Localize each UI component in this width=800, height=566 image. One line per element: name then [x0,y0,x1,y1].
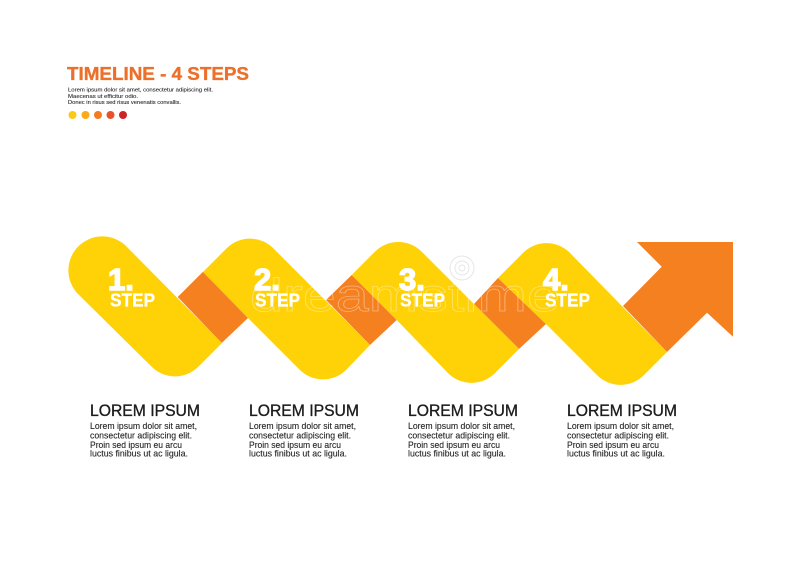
column 3 text: consectetur adipiscing elit. [408,430,510,440]
column 2 text: consectetur adipiscing elit. [249,430,351,440]
step 4 label: 4. [543,262,569,297]
intro text [68,88,213,106]
step 1 label: 1. [108,262,134,297]
arrow head [623,242,733,352]
step 1 label [108,262,155,310]
column 1 text: luctus finibus ut ac ligula. [90,448,188,458]
column 3 text: luctus finibus ut ac ligula. [408,448,506,458]
title: TIMELINE - 4 STEPS [67,64,249,84]
step 2 label: 2. [254,262,280,297]
zigzag arrow timeline [68,236,733,385]
intro text: Donec in risus sed risus venenatis convallis. [68,100,181,106]
band step 4 [498,243,667,385]
step 3 label: 3. [399,262,425,297]
intro text: Lorem ipsum dolor sit amet, consectetur adipiscing elit. [68,88,213,94]
column 4 text: Proin sed ipsum eu arcu [567,440,659,450]
band step 3 [352,242,519,383]
watermark: dreamstime [250,269,560,321]
watermark [250,256,560,321]
column 4 text: luctus finibus ut ac ligula. [567,448,665,458]
column 3 text: Lorem ipsum dolor sit amet, [408,421,515,431]
column 1 text: Proin sed ipsum eu arcu [90,440,182,450]
column 1 text: LOREM IPSUM [90,402,200,420]
intro text: Maecenas ut efficitur odio. [68,94,138,100]
connector 2 [326,275,397,345]
column 4 text: LOREM IPSUM [567,402,677,420]
step 3 label [399,262,445,310]
connector 3 [474,278,546,349]
column 2 text: LOREM IPSUM [249,402,359,420]
connector 1 [178,272,248,343]
header block [67,64,249,119]
column 1 text: consectetur adipiscing elit. [90,430,192,440]
band step 1 [68,236,222,376]
column 3 text: Proin sed ipsum eu arcu [408,440,500,450]
step 3 label: STEP [400,290,445,310]
step 1 label: STEP [110,290,155,310]
column 4 text: consectetur adipiscing elit. [567,430,669,440]
column 4 text: Lorem ipsum dolor sit amet, [567,421,674,431]
column 2 text: Proin sed ipsum eu arcu [249,440,341,450]
colour dots [68,111,127,119]
step 4 label [543,262,590,310]
column 3 text: LOREM IPSUM [408,402,518,420]
column 2 text: Lorem ipsum dolor sit amet, [249,421,356,431]
column 4 text [567,402,677,458]
column 2 text: luctus finibus ut ac ligula. [249,448,347,458]
step 4 label: STEP [545,290,590,310]
column 1 text: Lorem ipsum dolor sit amet, [90,421,197,431]
column 2 text [249,402,359,458]
column 3 text [408,402,518,458]
step 2 label: STEP [255,290,300,310]
column 1 text [90,402,200,458]
band step 2 [203,239,370,379]
step 2 label [254,262,300,310]
